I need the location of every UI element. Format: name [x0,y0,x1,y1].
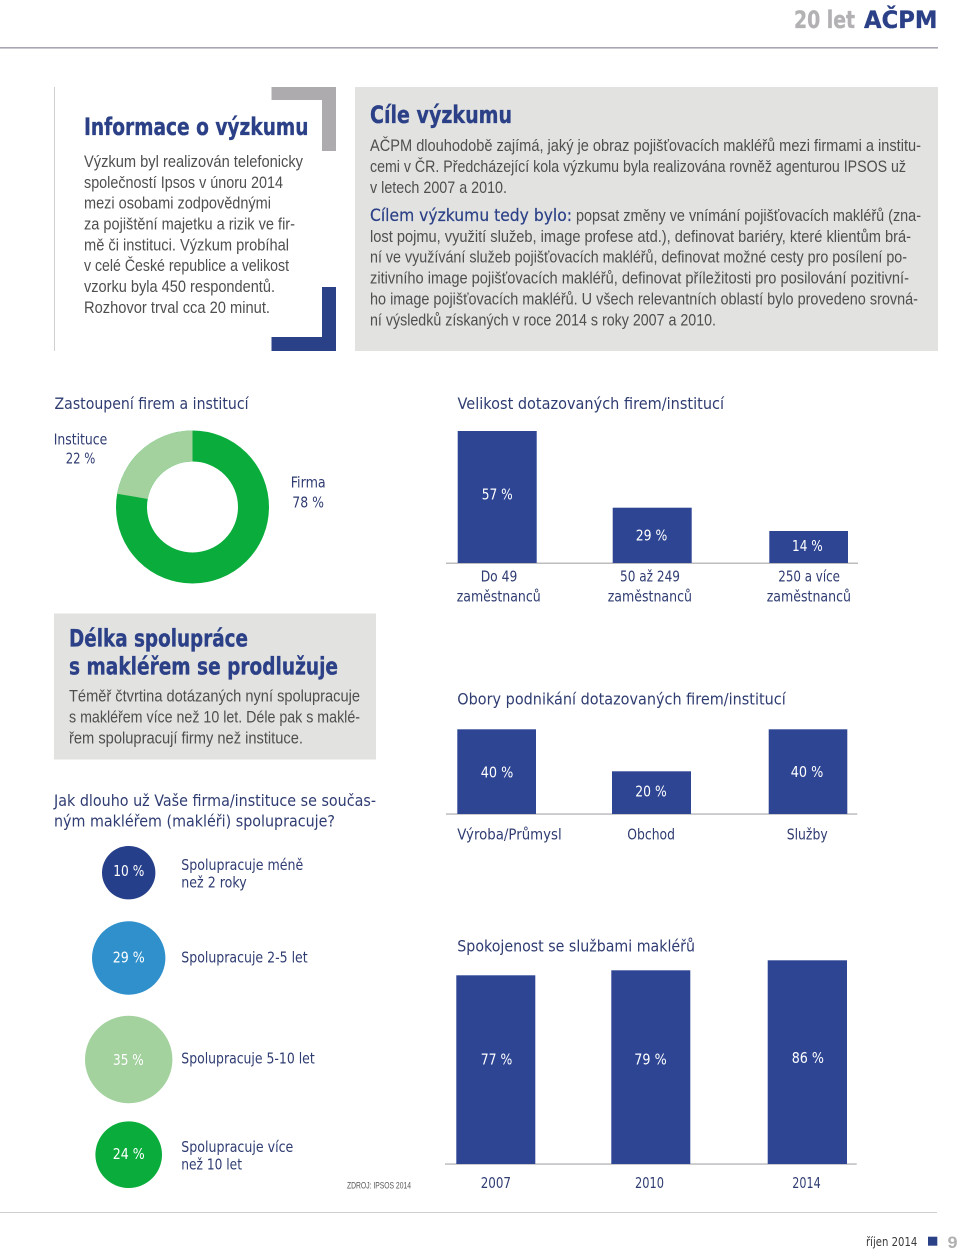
bar: 40 %: 40 % [791,763,823,781]
category labels: 250 a více [778,568,840,586]
bar: 2007 77 % [456,975,535,1164]
bar: 57 % [458,431,537,563]
year labels: 2010 [635,1174,664,1192]
bar: 57 %: 57 % [482,486,513,504]
bar: 2014 86 % [768,960,847,1164]
bar: 40 % [769,729,847,814]
text block: intro: v letech 2007 a 2010. [370,179,507,197]
category labels: zaměstnanců [608,588,692,606]
heading: business sectors: Obory podnikání dotazovaných firem/institucí [457,690,786,709]
heading: Délka spolupráce [69,625,338,681]
panel: research goals [355,87,938,351]
circle item: 35 %: Spolupracuje 5-10 let [181,1049,315,1067]
circle item: 10 %: než 2 roky [181,874,247,892]
bar: 14 % [769,531,848,563]
heading: Délka spolupráce: Délka spolupráce [69,625,248,653]
bar: 29 % [613,508,692,563]
circle item: 24 %: než 10 let [181,1156,242,1174]
circle item: 29 % [92,921,308,995]
panel: research information [54,87,336,351]
bar: 20 % [612,771,691,814]
text block: research information: Výzkum byl realizován telefonicky [84,153,304,171]
heading: size of firms: Velikost dotazovaných firem/institucí [458,394,725,413]
heading: Cíle výzkumu: Cíle výzkumu [370,101,512,129]
bar: 29 %: 29 % [636,527,667,545]
bracket: grey top corner [272,87,336,151]
bar: 2014 86 %: 86 % [792,1049,824,1067]
label: Firma 78 % [291,474,326,511]
question heading: Jak dlouho už Vaše firma/instituce se součas- [53,791,376,810]
bar: 2010 79 % [611,970,690,1164]
text block: goal details [370,206,921,330]
header logo text [794,4,938,34]
footer: date and page number [866,1233,958,1251]
donut segment: institutions 22 % [117,430,192,499]
circle item: 10 % [102,846,303,899]
circle item: 35 %: 35 % [113,1051,144,1069]
bar chart: size of firms [446,431,858,606]
year labels: 2007 [481,1174,511,1192]
question heading [53,791,376,831]
bracket: navy bottom corner [272,287,336,351]
bar: 40 %: 40 % [481,763,513,781]
category labels: 50 až 249 [620,568,680,586]
text block: intro [370,136,921,197]
bar chart: satisfaction [445,960,857,1192]
category labels: zaměstnanců [457,588,541,606]
heading: Informace o výzkumu: Informace o výzkumu [84,113,308,141]
circle item: 10 %: 10 % [113,862,144,880]
text block: goal details: popsat změny ve vnímání pojišťovacích makléřů (zna- [576,207,921,225]
year labels [481,1174,821,1192]
text block: research information: mě či instituci. Výzkum probíhal [84,236,289,254]
year labels: 2014 [792,1174,821,1192]
question heading: ným makléřem (makléři) spolupracuje? [54,812,335,831]
circle item: 24 % [95,1121,293,1188]
donut chart: firms and institutions [54,430,326,568]
text block: goal details: Cílem výzkumu tedy bylo: [370,206,572,226]
circle item: 24 %: 24 % [113,1145,145,1163]
heading: representation of firms and institutions: Zastoupení firem a institucí [54,394,249,413]
text block: research information: společností Ipsos v únoru 2014 [84,174,283,192]
circle item: 24 %: Spolupracuje více [181,1138,293,1156]
bar chart: business sectors [446,729,857,843]
category labels: zaměstnanců [767,588,851,606]
text block: cooperation summary [69,688,360,747]
bar: 14 %: 14 % [792,537,823,555]
text block: goal details: ní výsledků získaných v roce 2014 s roky 2007 a 2010. [370,312,716,330]
text block: research information: mezi osobami zodpovědnými [84,194,271,212]
category labels: Služby [787,825,828,843]
label: Firma 78 %: 78 % [292,493,324,511]
text block: cooperation summary: řem spolupracují firmy než instituce. [69,729,303,747]
heading: satisfaction: Spokojenost se službami makléřů [457,936,695,955]
bar: 2010 79 %: 79 % [634,1051,667,1069]
source note: ZDROJ: IPSOS 2014 [347,1180,411,1190]
text block: cooperation summary: Téměř čtvrtina dotázaných nyní spolupracuje [69,688,360,706]
bar: 20 %: 20 % [635,783,667,801]
label: Firma 78 %: Firma [291,474,326,492]
category labels [457,825,828,843]
category labels [457,568,851,606]
text block: research information: v celé České republice a velikost [84,256,289,275]
circle item: 10 %: Spolupracuje méně [181,856,303,874]
circle item: 35 % [85,1016,315,1103]
heading: Délka spolupráce: s makléřem se prodlužuje [69,653,338,681]
category labels: Výroba/Průmysl [457,825,562,843]
header logo text: AČPM [864,4,938,34]
circle item: 29 %: 29 % [113,949,145,967]
text block: research information: za pojištění majetku a rizik ve fir- [84,216,295,234]
text block: research information: Rozhovor trval cca 20 minut. [84,299,270,317]
label: Instituce 22 %: Instituce [54,431,107,449]
text block: research information: vzorku byla 450 respondentů. [84,278,275,296]
text block: cooperation summary: s makléřem více než 10 let. Déle pak s maklé- [69,709,360,727]
circle item: 29 %: Spolupracuje 2-5 let [181,948,308,966]
header logo text: 20 let [794,6,855,34]
text block: research information [84,153,304,317]
footer: date and page number: říjen 2014 [866,1234,917,1249]
category labels: Do 49 [481,568,517,586]
label: Instituce 22 %: 22 % [66,449,95,467]
bar: 2007 77 %: 77 % [481,1051,512,1069]
text block: goal details: zitivního image pojišťovacích makléřů, definovat příležitosti pro posilování pozitivní- [370,270,909,288]
panel: length of cooperation [54,614,376,760]
bar: 40 % [457,729,536,814]
category labels: Obchod [627,825,675,843]
label: Instituce 22 % [54,431,107,467]
